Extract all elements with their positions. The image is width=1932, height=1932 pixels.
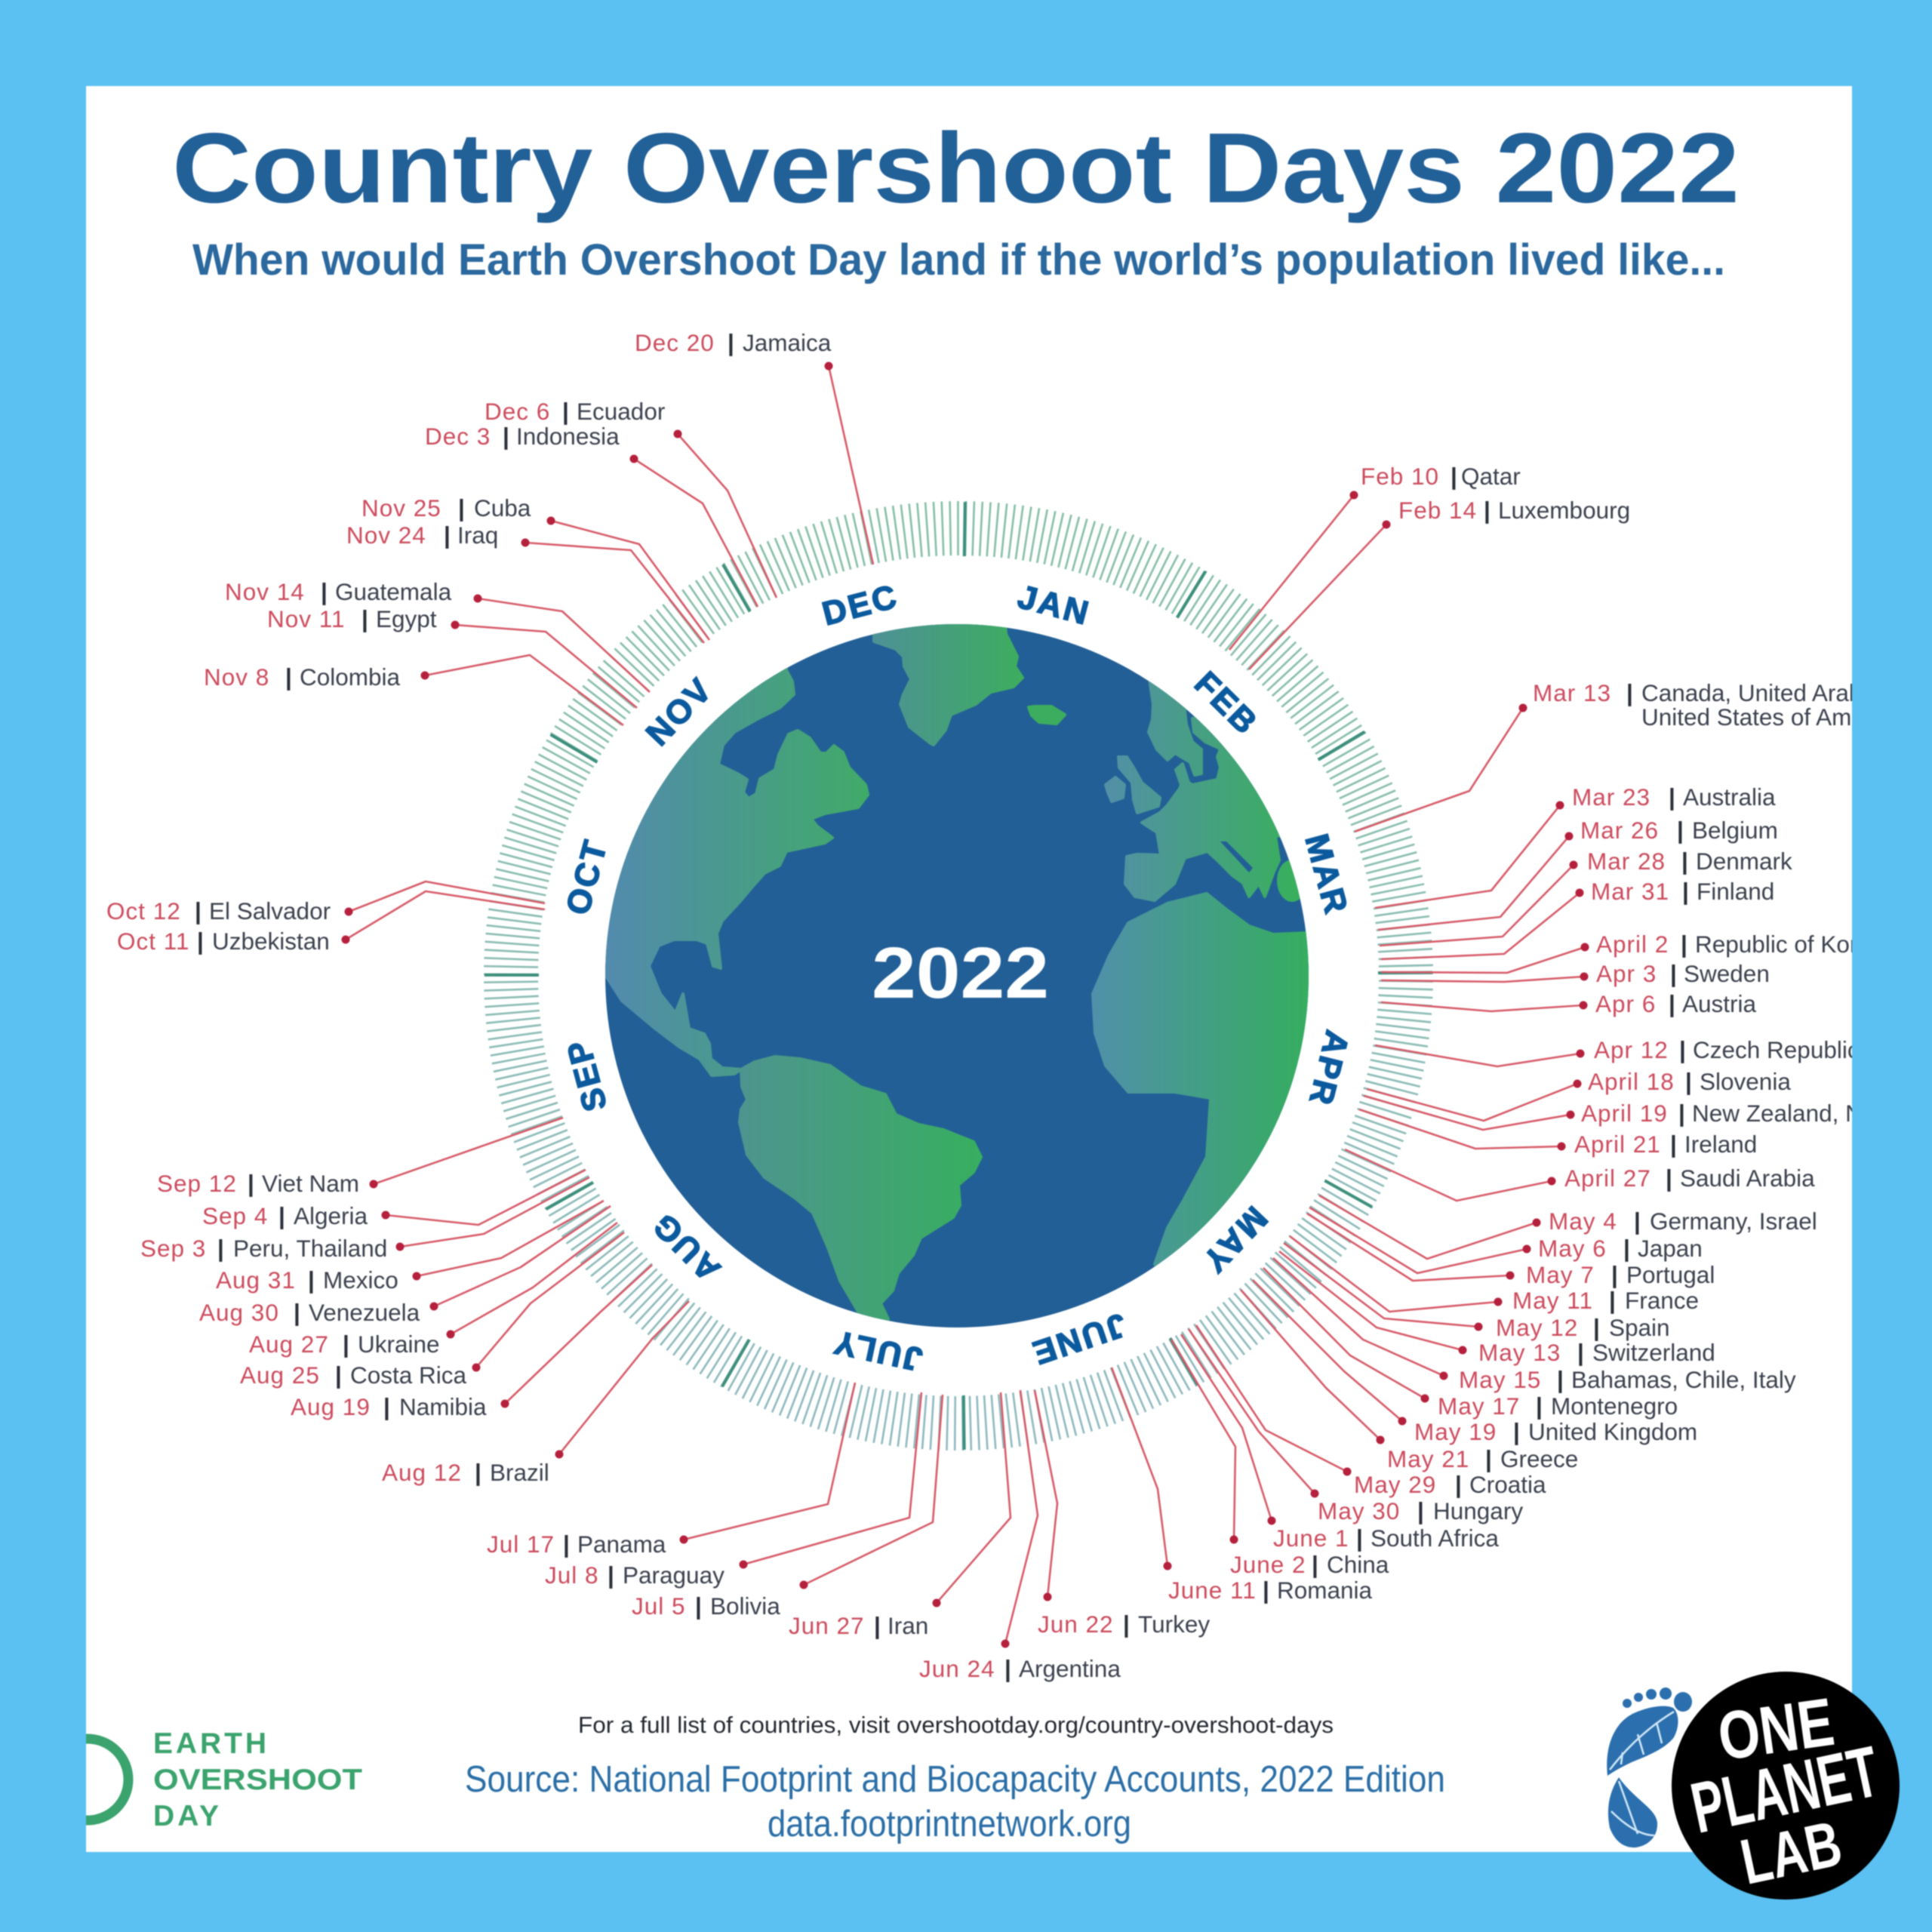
continent: Africa [1091,892,1309,1266]
month labels: MAY [1194,1199,1275,1281]
label: May 19 United Kingdom [1253,1280,1697,1445]
label: Jun 22 Turkey: Jun 22 [1038,1611,1114,1638]
label: Mar 28 Denmark: Mar 28 [1587,848,1666,875]
label: Aug 30 Venezuela: Venezuela [309,1299,420,1326]
label: Apr 12 Czech Republic [1375,1036,1860,1066]
label: April 27 Saudi Arabia: | [1666,1164,1672,1192]
label: Nov 14 Guatemala [225,578,650,692]
label: April 21 Ireland: Ireland [1684,1131,1757,1158]
continent: Turkey [1276,860,1301,903]
label: Mar 31 Finland: Finland [1697,878,1774,905]
label: Feb 10 Qatar: | [1451,463,1457,490]
label: Aug 19 Namibia: Aug 19 [291,1393,371,1420]
label: Jul 8 Paraguay [545,1392,921,1589]
label: Mar 23 Australia: Australia [1683,783,1776,811]
label: Nov 14 Guatemala: | [321,578,328,605]
label: Sep 4 Algeria: | [278,1202,285,1229]
label: Dec 6 Ecuador: | [562,398,569,425]
label: Aug 27 Ukraine: Aug 27 [249,1331,329,1358]
label: May 30 Hungary: | [1417,1497,1424,1524]
label: Jul 17 Panama: Jul 17 [487,1531,555,1558]
label: June 2 China: China [1327,1551,1389,1578]
label: Oct 11 Uzbekistan: Uzbekistan [212,928,330,955]
label: Feb 10 Qatar: Feb 10 [1361,463,1439,490]
label: Nov 24 Iraq [346,521,704,643]
label: June 2 China: | [1312,1551,1318,1578]
label: May 11 France [1290,1236,1699,1314]
label: Jul 8 Paraguay: Jul 8 [545,1561,599,1589]
label: May 21 Greece: Greece [1500,1445,1578,1472]
label: May 11 France: France [1625,1287,1699,1314]
label: Nov 25 Cuba: Nov 25 [361,494,441,521]
label: Dec 3 Indonesia: Indonesia [516,423,620,450]
label: Aug 12 Brazil: Aug 12 [382,1459,462,1486]
label: Jun 27 Iran: Jun 27 [789,1612,865,1639]
label: Sep 12 Viet Nam: | [248,1170,254,1197]
label: Jun 24 Argentina [919,1390,1121,1682]
label: Mar 31 Finland [1381,878,1774,959]
label: Sep 12 Viet Nam [157,1118,563,1197]
label: Aug 30 Venezuela: Aug 30 [199,1299,279,1326]
label: Nov 14 Guatemala: Nov 14 [225,578,305,605]
month labels: JAN [1014,578,1094,632]
continent: South America [740,1057,981,1319]
continent: Greenland [872,623,1025,747]
label: Jun 22 Turkey: Turkey [1138,1611,1210,1638]
label: April 2 Republic of Korea: Republic of Korea [1695,931,1884,958]
label: Oct 12 El Salvador [106,881,545,924]
label: Jun 27 Iran: | [874,1612,881,1639]
label: May 15 Bahamas, Chile, Italy: May 15 [1459,1366,1541,1393]
label: Sep 4 Algeria: Sep 4 [202,1202,268,1229]
Adriatic sea [1220,841,1253,872]
label: June 11 Romania: Romania [1277,1577,1373,1604]
badge: One Planet Lab: LAB [1735,1807,1847,1899]
label: Mar 23 Australia: Mar 23 [1572,783,1651,811]
label: Mar 28 Denmark [1380,848,1792,946]
label: Jul 8 Paraguay: Paraguay [623,1561,724,1589]
label: Jul 5 Bolivia: Jul 5 [632,1592,686,1620]
label: May 12 Spain: May 12 [1496,1314,1578,1341]
label: June 1 South Africa: South Africa [1371,1524,1499,1552]
label: Dec 3 Indonesia: | [503,423,509,450]
label: Sep 3 Peru, Thailand: Sep 3 [140,1235,206,1262]
label: Jun 22 Turkey: | [1123,1611,1130,1638]
label: Feb 10 Qatar: Qatar [1461,463,1521,490]
label: Apr 3 Sweden: Sweden [1684,960,1770,987]
label: Aug 19 Namibia: | [383,1393,390,1420]
label: Nov 24 Iraq: Nov 24 [346,521,426,549]
calendar tick ring [485,502,1432,1450]
label: Jul 5 Bolivia: Bolivia [710,1592,780,1620]
label: Mar 31 Finland: Mar 31 [1591,878,1669,905]
label: Jul 17 Panama: | [563,1531,570,1558]
label: Sep 3 Peru, Thailand: Peru, Thailand [233,1235,387,1262]
label: Aug 30 Venezuela: | [294,1299,300,1326]
label: Sep 3 Peru, Thailand [140,1177,589,1262]
label: Aug 31 Mexico: | [308,1266,315,1294]
label: Aug 19 Namibia [291,1265,652,1420]
label: Nov 8 Colombia: Nov 8 [204,663,269,691]
label: April 27 Saudi Arabia: Saudi Arabia [1680,1164,1815,1192]
label: May 15 Bahamas, Chile, Italy: | [1557,1366,1564,1393]
label: Aug 31 Mexico [216,1201,604,1294]
label: May 7 Portugal: May 7 [1526,1261,1595,1288]
label: Dec 20 Jamaica: Jamaica [743,329,832,356]
label: April 19 New Zealand: April 19 [1581,1100,1668,1127]
label: Feb 14 Luxembourg [1249,497,1630,669]
label: Nov 25 Cuba: | [458,494,465,521]
label: April 21 Ireland [1359,1109,1757,1158]
label: May 15 Bahamas, Chile, Italy: Bahamas, Chile, Italy [1571,1366,1796,1393]
label: May 12 Spain: Spain [1609,1314,1670,1341]
label: Mar 13 Canada, UAE, USA [1355,679,1932,832]
continent: Ireland [1106,777,1124,801]
label: June 11 Romania: June 11 [1168,1577,1257,1604]
month labels: JULY [829,1323,925,1378]
logo: Earth Overshoot Day: OVERSHOOT [153,1764,362,1796]
label: Dec 20 Jamaica [635,329,873,565]
continent: North America [605,667,870,1078]
label: Mar 28 Denmark: Denmark [1696,848,1792,875]
source line: Source: National Footprint and Biocapacity Accounts, 2022 Edition [465,1759,1445,1800]
label: May 30 Hungary [1189,1329,1523,1524]
label: Jun 24 Argentina: Jun 24 [919,1655,995,1682]
label: Aug 31 Mexico: Aug 31 [216,1266,296,1294]
label: Feb 14 Luxembourg: Luxembourg [1498,497,1630,524]
globe [605,623,1309,1328]
label: Apr 6 Austria: Apr 6 [1595,990,1656,1017]
label: April 2 Republic of Korea [1381,931,1884,973]
label: Apr 12 Czech Republic: | [1679,1036,1686,1063]
month labels: DEC [819,577,903,632]
label: Feb 10 Qatar [1229,463,1521,650]
label: Oct 12 El Salvador: El Salvador [209,897,331,924]
logo: Earth Overshoot Day: EARTH [153,1727,266,1760]
label: May 13 Switzerland: | [1577,1339,1584,1366]
label: May 11 France: May 11 [1512,1287,1593,1314]
label: Aug 12 Brazil: | [475,1459,481,1486]
label: April 27 Saudi Arabia: April 27 [1564,1164,1651,1192]
label: May 19 United Kingdom: | [1513,1418,1520,1445]
label: Aug 27 Ukraine [249,1223,617,1358]
label: Feb 14 Luxembourg: Feb 14 [1398,497,1477,524]
month labels: SEP [560,1035,614,1115]
label: Apr 3 Sweden: | [1670,960,1677,987]
label: Dec 3 Indonesia [425,423,758,607]
label: May 6 Japan: Japan [1638,1235,1703,1262]
label: Nov 24 Iraq: | [444,521,451,549]
month labels: NOV [639,670,720,753]
label: Jun 22 Turkey [1035,1390,1210,1638]
label: Jul 8 Paraguay: | [608,1561,614,1589]
badge: One Planet Lab: ONE [1714,1684,1838,1775]
label: Mar 31 Finland: | [1682,878,1689,905]
label: Mar 26 Belgium: Mar 26 [1580,817,1659,844]
label: Aug 25 Costa Rica: Costa Rica [350,1361,467,1389]
label: May 12 Spain: | [1593,1314,1600,1341]
label: Mar 26 Belgium [1378,817,1778,930]
label: Mar 13 Canada, UAE, USA: | [1626,679,1633,706]
label: June 11 Romania: | [1263,1577,1269,1604]
label: June 2 China [1171,1340,1389,1578]
label: Apr 12 Czech Republic: Czech Republic [1693,1036,1860,1063]
label: Oct 11 Uzbekistan [117,891,545,955]
title: Country Overshoot Days 2022 [172,112,1740,223]
label: Jun 27 Iran [789,1392,1011,1639]
label: May 4 Germany, Israel: | [1634,1208,1641,1235]
month labels: JUNE [1026,1306,1131,1372]
label: June 1 South Africa: | [1356,1524,1363,1552]
label: Dec 6 Ecuador [485,398,777,598]
label: May 13 Switzerland: May 13 [1478,1339,1561,1366]
label: Jun 24 Argentina: Argentina [1019,1655,1121,1682]
label: May 17 Montenegro [1263,1268,1678,1420]
label: May 4 Germany, Israel: Germany, Israel [1650,1208,1817,1235]
label: May 21 Greece [1241,1290,1578,1472]
label: Aug 30 Venezuela [199,1206,611,1326]
label: May 21 Greece: | [1485,1445,1492,1472]
label: Apr 6 Austria: | [1669,990,1675,1017]
label: May 29 Croatia: May 29 [1354,1471,1436,1498]
label: Nov 11 Egypt: | [361,605,368,632]
month labels: FEB [1187,665,1266,743]
label: May 4 Germany, Israel: May 4 [1549,1208,1617,1235]
label: Dec 6 Ecuador: Dec 6 [485,398,550,425]
label: April 19 New Zealand: | [1678,1100,1685,1127]
label: Mar 13 Canada, UAE, USA: United States of America [1641,703,1903,731]
label: Apr 3 Sweden: Apr 3 [1596,960,1657,987]
label: June 1 South Africa: June 1 [1273,1524,1349,1552]
logo: Earth Overshoot Day: DAY [153,1800,219,1832]
month labels [559,577,1356,1378]
label: Oct 11 Uzbekistan: | [197,928,204,955]
footnote: full list link: For a full list of countries, visit overshootday.org/country-overshoot-days [578,1712,1334,1738]
continent: Great Britain [1118,757,1160,813]
label: May 7 Portugal: | [1611,1261,1618,1288]
label: May 13 Switzerland [1279,1251,1715,1366]
label: April 19 New Zealand: New Zealand, Norway [1692,1100,1926,1127]
label: May 29 Croatia: Croatia [1469,1471,1546,1498]
month labels: OCT [559,835,615,918]
label: May 6 Japan: | [1623,1235,1630,1262]
source url: data.footprintnetwork.org [768,1804,1131,1844]
label: Jul 17 Panama: Panama [577,1531,666,1558]
label: Aug 27 Ukraine: Ukraine [358,1331,440,1358]
label: Mar 13 Canada, UAE, USA: Mar 13 [1533,679,1611,706]
continent: Europe [1123,716,1281,903]
country labels and leader lines [106,329,1932,1682]
label: Jul 5 Bolivia: | [695,1592,702,1620]
label: May 7 Portugal [1307,1214,1715,1288]
label: Apr 12 Czech Republic: Apr 12 [1594,1036,1669,1063]
label: April 2 Republic of Korea: April 2 [1596,931,1669,958]
label: Aug 25 Costa Rica: | [335,1361,342,1389]
label: Nov 25 Cuba [361,494,709,640]
label: May 4 Germany, Israel [1319,1195,1817,1259]
continent: Iceland [1029,706,1065,724]
label: June 2 China: June 2 [1230,1551,1306,1578]
label: Nov 11 Egypt [267,605,637,708]
label: April 18 Slovenia [1367,1068,1791,1121]
label: May 29 Croatia: | [1455,1471,1462,1498]
label: May 30 Hungary: Hungary [1433,1497,1523,1524]
label: Mar 23 Australia [1375,783,1776,908]
label: May 29 Croatia [1196,1325,1546,1498]
label: May 15 Bahamas, Chile, Italy [1273,1258,1796,1393]
label: Apr 6 Austria: Austria [1682,990,1757,1017]
label: Sep 3 Peru, Thailand: | [217,1235,224,1262]
label: Mar 28 Denmark: | [1681,848,1688,875]
label: Aug 19 Namibia: Namibia [399,1393,487,1420]
label: April 2 Republic of Korea: | [1681,931,1687,958]
continent: Scandinavia [1149,679,1201,775]
label: Dec 20 Jamaica: Dec 20 [635,329,715,356]
label: Apr 3 Sweden [1381,960,1770,987]
label: Feb 14 Luxembourg: | [1484,497,1491,524]
label: Nov 8 Colombia [204,655,623,725]
label: May 19 United Kingdom: United Kingdom [1528,1418,1697,1445]
label: April 21 Ireland: | [1670,1131,1677,1158]
label: Sep 12 Viet Nam: Sep 12 [157,1170,237,1197]
label: Sep 12 Viet Nam: Viet Nam [262,1170,359,1197]
label: Dec 3 Indonesia: Dec 3 [425,423,491,450]
label: Nov 25 Cuba: Cuba [474,494,531,521]
logo: Earth Overshoot Day [47,1727,362,1832]
label: Oct 12 El Salvador: Oct 12 [106,897,181,924]
month labels: MAR [1297,830,1355,919]
logo: footprint [1607,1687,1692,1847]
label: May 13 Switzerland: Switzerland [1592,1339,1715,1366]
label: Nov 14 Guatemala: Guatemala [335,578,452,605]
label: Aug 12 Brazil [382,1301,689,1486]
label: Aug 12 Brazil: Brazil [490,1459,549,1486]
month labels: AUG [645,1205,728,1288]
label: April 27 Saudi Arabia [1345,1149,1815,1201]
label: May 17 Montenegro: | [1536,1392,1543,1420]
label: Aug 27 Ukraine: | [343,1331,349,1358]
label: May 12 Spain [1284,1243,1670,1341]
month labels: APR [1301,1026,1356,1110]
label: May 11 France: | [1609,1287,1616,1314]
label: Apr 6 Austria [1381,990,1757,1017]
globe year label: 2022 [872,933,1049,1014]
label: May 17 Montenegro: May 17 [1438,1392,1520,1420]
label: Jun 24 Argentina: | [1004,1655,1011,1682]
subtitle: When would Earth Overshoot Day land if the world’s population lived like... [192,235,1725,285]
label: May 19 United Kingdom: May 19 [1414,1418,1497,1445]
label: June 11 Romania [1112,1367,1373,1604]
label: April 21 Ireland: April 21 [1574,1131,1661,1158]
label: Aug 25 Costa Rica: Aug 25 [240,1361,320,1389]
label: May 6 Japan [1309,1208,1703,1273]
label: May 30 Hungary: May 30 [1318,1497,1400,1524]
label: Nov 11 Egypt: Egypt [376,605,437,632]
label: Dec 6 Ecuador: Ecuador [577,398,665,425]
label: Dec 20 Jamaica: | [728,329,734,356]
label: Nov 8 Colombia: | [285,663,292,691]
label: June 1 South Africa [1181,1334,1499,1552]
label: Jun 27 Iran: Iran [888,1612,928,1639]
label: Aug 25 Costa Rica [240,1232,624,1389]
label: May 21 Greece: May 21 [1387,1445,1469,1472]
label: Nov 8 Colombia: Colombia [300,663,401,691]
label: Mar 23 Australia: | [1669,783,1675,811]
label: April 19 New Zealand [1364,1096,1926,1130]
label: Oct 12 El Salvador: | [195,897,202,924]
label: April 18 Slovenia: Slovenia [1700,1068,1791,1095]
label: Jul 5 Bolivia [632,1395,943,1620]
label: Nov 24 Iraq: Iraq [457,521,498,549]
label: Jul 17 Panama [487,1383,855,1558]
label: Sep 4 Algeria: Algeria [294,1202,368,1229]
label: Oct 11 Uzbekistan: Oct 11 [117,928,189,955]
label: May 17 Montenegro: Montenegro [1551,1392,1678,1420]
label: Mar 26 Belgium: Belgium [1692,817,1778,844]
label: Mar 26 Belgium: | [1677,817,1684,844]
badge: One Planet Lab [1672,1672,1900,1900]
label: May 6 Japan: May 6 [1538,1235,1607,1262]
label: Aug 31 Mexico: Mexico [323,1266,398,1294]
label: April 18 Slovenia: April 18 [1588,1068,1675,1095]
label: May 7 Portugal: Portugal [1626,1261,1715,1288]
label: April 18 Slovenia: | [1685,1068,1692,1095]
label: Nov 11 Egypt: Nov 11 [267,605,345,632]
label: Sep 4 Algeria [202,1170,586,1229]
